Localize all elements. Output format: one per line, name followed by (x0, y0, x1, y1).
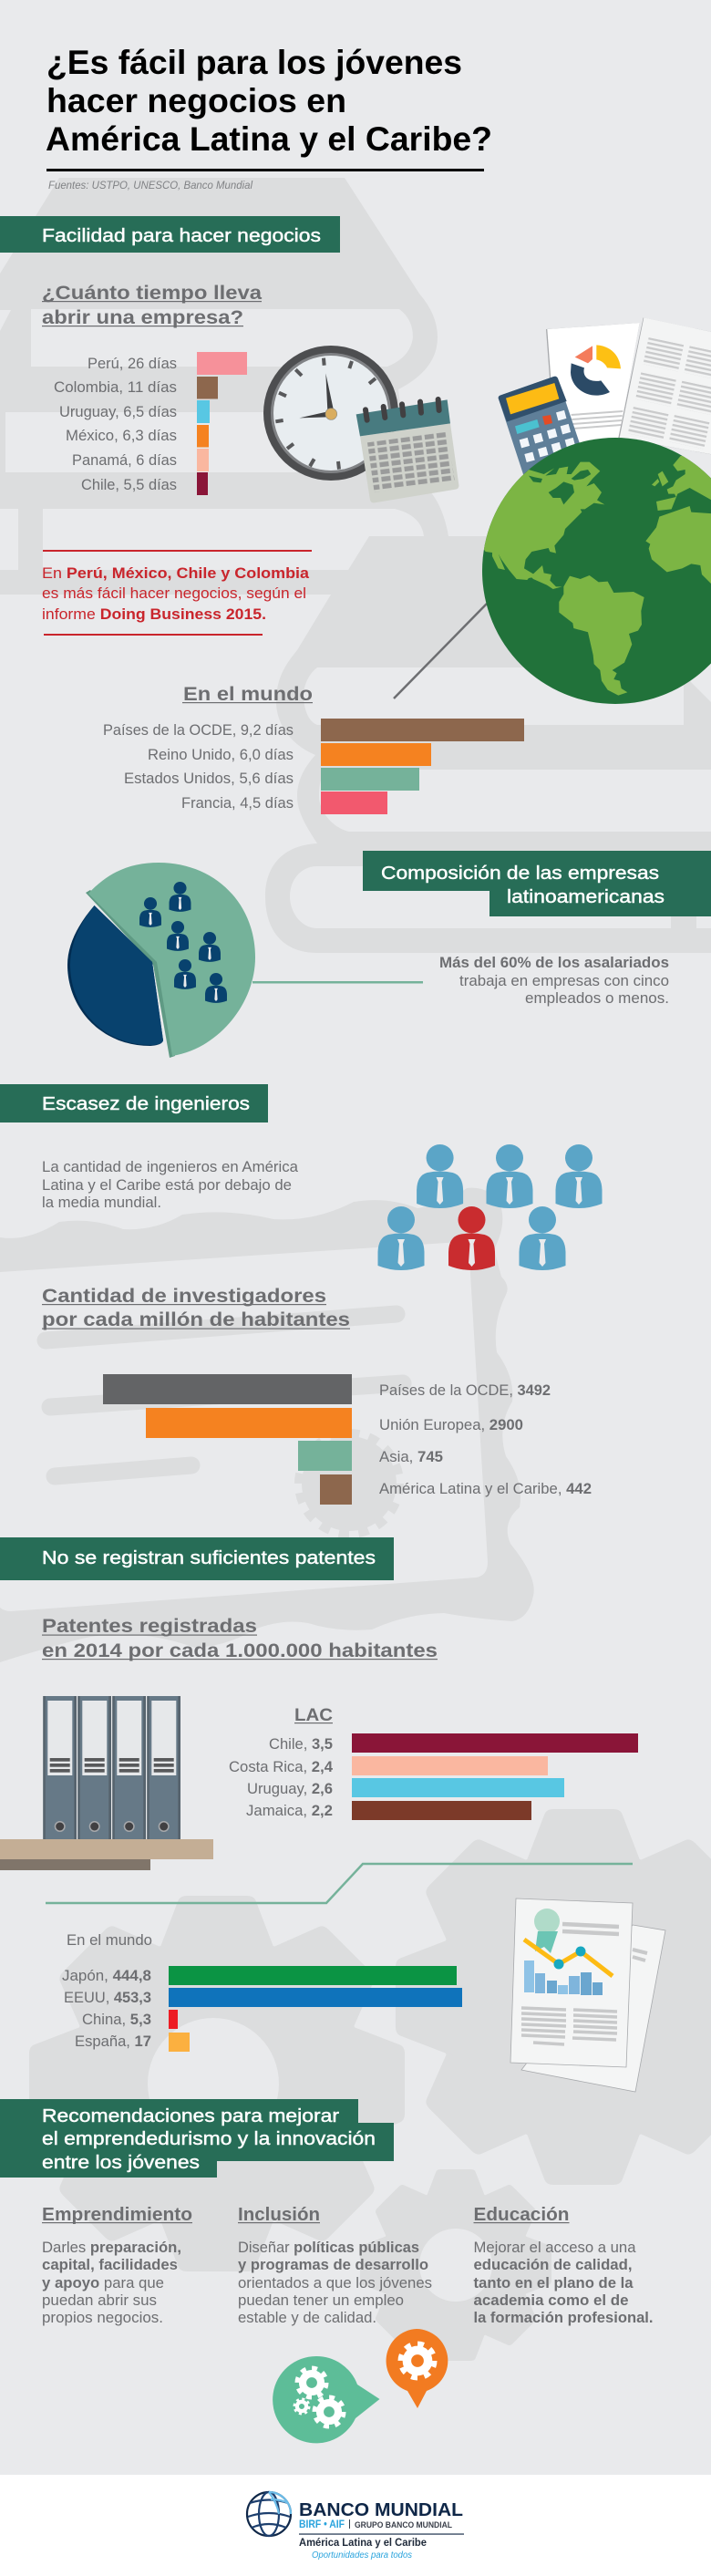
column: Inclusión (238, 2205, 432, 2326)
heading: LAC: LAC (294, 1706, 333, 1725)
section banner: Facilidad para hacer negocios (0, 216, 340, 253)
section banner: Composición de las empresas latinoamericanas: Composición de las empresas (381, 863, 659, 884)
logo: Banco Mundial: BIRF • AIF (299, 2519, 345, 2530)
icon: clock (263, 346, 398, 481)
bar chart: researchers per million: Unión Europea, 2900 (379, 1417, 523, 1433)
section banner: Composición de las empresas latinoamericanas: latinoamericanas (507, 886, 665, 907)
bar chart: days to open a business in Latin America: México, 6,3 días (66, 428, 177, 444)
text block: employees statistic: trabaja en empresas con cinco (459, 973, 669, 989)
callout: Doing Business: es más fácil hacer negocios, según el (42, 585, 306, 602)
text block: engineers: la media mundial. (42, 1195, 161, 1211)
bar chart: days to open a business in the world: Reino Unido, 6,0 días (148, 747, 294, 763)
heading: Cantidad de investigadores: Cantidad de investigadores (42, 1286, 326, 1307)
title: América Latina y el Caribe? (46, 120, 492, 158)
column: Educación: Educación (474, 2205, 569, 2225)
heading: Patentes registradas: en 2014 por cada 1.000.000 habitantes (42, 1640, 438, 1661)
section banner: Recomendaciones: el emprendedurismo y la innovación (42, 2128, 376, 2149)
bar chart: days to open a business in Latin America: Chile, 5,5 días (81, 477, 177, 493)
section banner: No se registran suficientes patentes: No se registran suficientes patentes (42, 1547, 376, 1568)
section banner: Composición de las empresas latinoamericanas (363, 851, 711, 916)
bar chart: researchers per million (103, 1374, 592, 1505)
connector line from pie chart (252, 981, 423, 983)
logo: Banco Mundial: GRUPO BANCO MUNDIAL (355, 2520, 452, 2530)
icon: connector line from globe (394, 604, 487, 698)
sources: Fuentes: USTPO, UNESCO, Banco Mundial (48, 179, 252, 191)
icon: green speech bubble with gears (273, 2356, 379, 2443)
column: Inclusión: estable y de calidad. (238, 2310, 376, 2326)
donut chart (571, 345, 621, 396)
title: hacer negocios en (46, 82, 346, 119)
icon: group of engineers (377, 1144, 602, 1270)
bar chart: LAC patents: Costa Rica, 2,4 (229, 1759, 334, 1775)
column: Emprendimiento (42, 2205, 192, 2326)
column: Educación: academia como el de (474, 2292, 629, 2309)
logo: Banco Mundial: América Latina y el Caribe (299, 2536, 427, 2549)
bar chart: days to open a business in the world: Países de la OCDE, 9,2 días (103, 722, 294, 739)
section banner: Escasez de ingenieros (0, 1084, 268, 1122)
heading: Patentes registradas: Patentes registradas (42, 1616, 257, 1637)
title (46, 44, 492, 171)
text block: employees statistic: Más del 60% de los asalariados (439, 955, 669, 971)
title: ¿Es fácil para los jóvenes (46, 44, 462, 81)
text block: employees statistic: empleados o menos. (525, 990, 669, 1007)
column: Inclusión: puedan tener un empleo (238, 2292, 404, 2309)
bar chart: days to open a business in Latin America (54, 352, 247, 495)
callout: Doing Business (42, 550, 312, 636)
bar chart: world patents (62, 1966, 462, 2052)
icon: binders on shelf (0, 1696, 213, 1870)
callout: Doing Business: En Perú, México, Chile y Colombia (42, 565, 310, 582)
heading: Cantidad de investigadores (42, 1286, 350, 1330)
heading: ¿Cuánto tiempo lleva abrir una empresa? (42, 283, 262, 328)
bar chart: researchers per million: América Latina y el Caribe, 442 (379, 1481, 592, 1497)
heading: Cantidad de investigadores: por cada millón de habitantes (42, 1309, 350, 1330)
section banner: Facilidad para hacer negocios: Facilidad para hacer negocios (42, 225, 321, 246)
section banner: Escasez de ingenieros: Escasez de ingenieros (42, 1093, 250, 1114)
column: Educación: la formación profesional. (474, 2310, 653, 2326)
text block: engineers (42, 1159, 299, 1211)
bar chart: researchers per million: Países de la OCDE, 3492 (379, 1382, 551, 1399)
bar chart: days to open a business in the world: Francia, 4,5 días (181, 795, 294, 812)
heading: En el mundo: En el mundo (183, 684, 313, 705)
section banner: Recomendaciones: Recomendaciones para mejorar (42, 2105, 339, 2126)
logo: Banco Mundial: Oportunidades para todos (312, 2550, 412, 2560)
column: Inclusión: y programas de desarrollo (238, 2257, 428, 2273)
footer band (0, 2475, 711, 2576)
heading: ¿Cuánto tiempo lleva abrir una empresa?: abrir una empresa? (42, 307, 243, 328)
logo: Banco Mundial: BANCO MUNDIAL (299, 2500, 463, 2520)
column: Inclusión: Inclusión (238, 2205, 320, 2225)
icon: report papers with donut chart (546, 317, 711, 456)
icon: calculator (499, 377, 588, 486)
icon: globe (480, 438, 711, 704)
bar chart: days to open a business in the world: Estados Unidos, 5,6 días (124, 771, 294, 787)
icon: patent documents (510, 1898, 665, 2092)
bar chart: LAC patents (229, 1733, 638, 1820)
section banner: Recomendaciones (0, 2099, 394, 2178)
column: Educación: tanto en el plano de la (474, 2275, 634, 2292)
section banner: Recomendaciones: entre los jóvenes (42, 2152, 200, 2173)
bar chart: world patents: EEUU, 453,3 (64, 1990, 151, 2006)
bar chart: LAC patents: Uruguay, 2,6 (247, 1781, 333, 1797)
column: Educación: educación de calidad, (474, 2257, 633, 2273)
bar chart: LAC patents: Jamaica, 2,2 (246, 1803, 333, 1819)
text block: engineers: La cantidad de ingenieros en América (42, 1159, 299, 1175)
bar chart: LAC patents: Chile, 3,5 (269, 1736, 333, 1753)
column: Educación (474, 2205, 653, 2326)
label: En el mundo: En el mundo (67, 1932, 152, 1949)
bar chart: researchers per million: Asia, 745 (379, 1449, 443, 1465)
column: Emprendimiento: capital, facilidades (42, 2257, 178, 2273)
heading: ¿Cuánto tiempo lleva abrir una empresa?: ¿Cuánto tiempo lleva (42, 283, 262, 304)
column: Emprendimiento: y apoyo para que (42, 2275, 164, 2292)
text block: engineers: Latina y el Caribe está por debajo de (42, 1177, 292, 1194)
column: Emprendimiento: Emprendimiento (42, 2205, 192, 2225)
bar chart: days to open a business in Latin America: Colombia, 11 días (54, 379, 177, 396)
text block: employees statistic (439, 955, 669, 1007)
bar chart: days to open a business in Latin America: Perú, 26 días (88, 356, 177, 372)
column: Inclusión: orientados a que los jóvenes (238, 2275, 432, 2292)
divider line (46, 1864, 633, 1903)
column: Emprendimiento: Darles preparación, (42, 2240, 181, 2256)
bar chart: days to open a business in Latin America: Uruguay, 6,5 días (59, 404, 177, 420)
column: Inclusión: Diseñar políticas públicas (238, 2240, 419, 2256)
column: Emprendimiento: propios negocios. (42, 2310, 163, 2326)
bar chart: days to open a business in the world (103, 719, 524, 814)
callout: Doing Business: informe Doing Business 2015. (42, 606, 266, 623)
pie chart: company composition (67, 863, 255, 1058)
icon: orange pin with gear (386, 2329, 448, 2408)
bar chart: world patents: España, 17 (75, 2033, 151, 2050)
column: Educación: Mejorar el acceso a una (474, 2240, 636, 2256)
heading: Patentes registradas (42, 1616, 438, 1661)
bar chart: world patents: Japón, 444,8 (62, 1968, 151, 1984)
icon: world bank globe (247, 2492, 291, 2536)
logo: Banco Mundial (247, 2492, 464, 2560)
bar chart: days to open a business in Latin America: Panamá, 6 días (72, 452, 177, 469)
icon: calendar (356, 399, 459, 502)
column: Emprendimiento: puedan abrir sus (42, 2292, 157, 2309)
bar chart: world patents: China, 5,3 (82, 2012, 151, 2028)
section banner: No se registran suficientes patentes (0, 1537, 394, 1580)
